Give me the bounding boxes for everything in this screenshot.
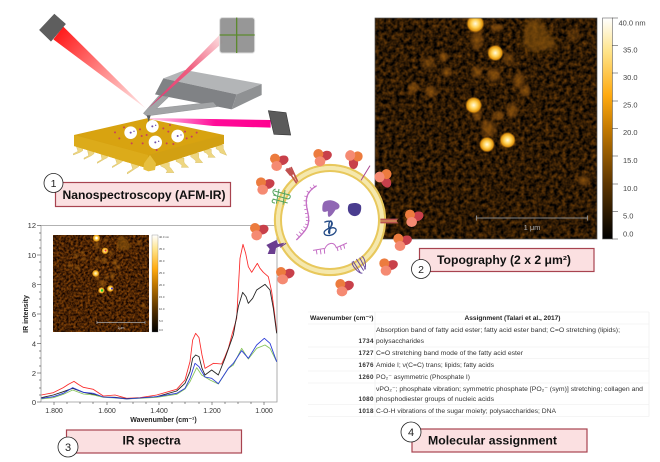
table rows: 1018 [358,408,374,415]
colour scale bar: 25.0 [623,100,638,110]
panel: assignment table [308,312,649,416]
inset: topography map with measurement points [53,234,170,332]
spectra curves [41,244,277,399]
table rows: 1676 [358,362,374,369]
icon: photodetector block [268,111,291,135]
label 1: Nanospectroscopy (AFM-IR) [44,174,230,206]
colour scale bar: 15.0 [623,156,638,165]
arrow: reflected beam to detector [148,34,223,108]
inset: topography map with measurement points: 30.0 [159,259,165,263]
table rows: C=O stretching band mode of the fatty acid ester [376,350,523,357]
inset: topography map with measurement points: 1μm [118,326,125,330]
y axis ticks and numbers: 2 [32,369,36,378]
label 2: Topography: 2 [418,264,424,276]
table header: Assignment (Talari et al., 2017) [464,315,560,322]
icon: tRNA hairpin [313,243,347,254]
table rows [358,327,644,415]
x axis ticks and numbers: 1.200 [203,408,221,415]
table row rules [308,312,649,416]
y axis ticks and numbers: 6 [32,310,36,319]
table rows: νPO₂⁻; phosphate vibration; symmetric phosphate [PO₂⁻ (sym)] stretching; collagen and [376,386,644,393]
height map image [375,14,597,239]
label 3: IR spectra: IR spectra [122,436,181,448]
icon: RNA strand [296,186,317,240]
y axis ticks and numbers: 4 [32,340,36,348]
y axis ticks and numbers: 10 [28,251,36,260]
label 1: Nanospectroscopy (AFM-IR): Nanospectroscopy (AFM-IR) [62,190,226,202]
icon: cantilever holder [143,70,262,122]
inset: topography map with measurement points: 15.0 [159,295,165,299]
table rows: Amide I; ν(C=C) trans; lipids; fatty acids [376,362,494,369]
label 3: IR spectra: 3 [65,442,71,454]
colour scale bar: 20.0 [623,128,638,137]
table header [310,315,560,322]
x axis ticks and numbers [45,402,273,415]
colour scale bar: 30.0 [623,73,638,82]
x axis ticks and numbers: 1.400 [150,408,168,415]
y axis title: IR intensity [23,295,30,333]
x axis ticks and numbers: 1.800 [45,408,63,415]
y axis ticks and numbers: 8 [32,280,36,290]
membrane proteins [266,166,399,273]
plot frame [41,226,277,402]
panel: topography map [375,14,646,239]
table rows: 1734 [358,338,374,345]
colour scale bar: 0.0 [623,230,633,238]
label 4: Molecular assignment: 4 [408,427,414,439]
inset: topography map with measurement points: 40.0 nm [159,235,170,239]
arrow: red laser beam [53,27,146,108]
table rows: 1727 [358,350,374,357]
scale bar: 1 μm [524,223,540,232]
icon: detector [220,18,255,53]
table rows: phosphodiester groups of nucleic acids [376,396,494,403]
panel: IR spectra chart [23,221,277,424]
membrane [275,165,385,275]
y axis ticks and numbers [28,221,41,407]
x axis ticks and numbers: 1.600 [98,408,116,415]
table rows: polysaccharides [376,338,424,345]
colour scale bar: 40.0 nm [618,18,646,28]
inset: topography map with measurement points: 20.0 [159,283,165,287]
icon: DNA coil [324,221,336,235]
label 2: Topography: Topography (2 x 2 μm²) [437,255,571,267]
panel: cell illustration [250,147,425,296]
table rows: Absorption band of fatty acid ester; fatty acid ester band; C=O stretching (lipids); [376,327,620,334]
arrow: magenta beam [150,118,271,128]
colour scale bar [602,18,646,239]
colour scale bar: 35.0 [623,46,638,54]
icon: laser source [39,14,66,41]
scale bar [476,216,588,232]
icon: folded protein [322,200,340,217]
label 4: Molecular assignment [401,422,587,452]
y axis ticks and numbers: 12 [28,221,36,230]
label 4: Molecular assignment: Molecular assignment [428,436,557,448]
inset: topography map with measurement points: 5.0 [159,319,163,323]
colour scale bar: 10.0 [623,184,638,193]
table header: Wavenumber (cm⁻¹) [310,315,374,322]
inset: topography map with measurement points: 35.0 [159,247,165,251]
icon: gold sample chip [73,118,227,174]
inset: topography map with measurement points: 25.0 [159,271,165,275]
inset: topography map with measurement points: 0.0 [159,328,163,332]
icon: cells on chip surface [114,120,198,151]
table rows: 1260 [358,374,374,381]
table rows: C-O-H vibrations of the sugar moiety; polysaccharides; DNA [376,408,557,415]
label 2: Topography [412,248,594,278]
table rows: 1080 [358,396,374,403]
inset: topography map with measurement points: 10.0 [159,307,165,311]
label 3: IR spectra [58,430,242,457]
x axis ticks and numbers: 1.000 [255,408,273,415]
icon: surface antigen group [250,147,425,296]
y axis ticks and numbers: 0 [32,398,36,407]
label 1: Nanospectroscopy (AFM-IR): 1 [51,178,57,190]
x axis title: Wavenumber (cm⁻¹) [130,417,197,424]
table rows: PO₂⁻ asymmetric (Phosphate I) [376,374,470,381]
icon: RNA teeth [296,185,315,237]
panel: AFM-IR instrument illustration [39,14,291,174]
colour scale bar: 5.0 [623,212,633,220]
icon: dark globular protein [348,203,361,216]
